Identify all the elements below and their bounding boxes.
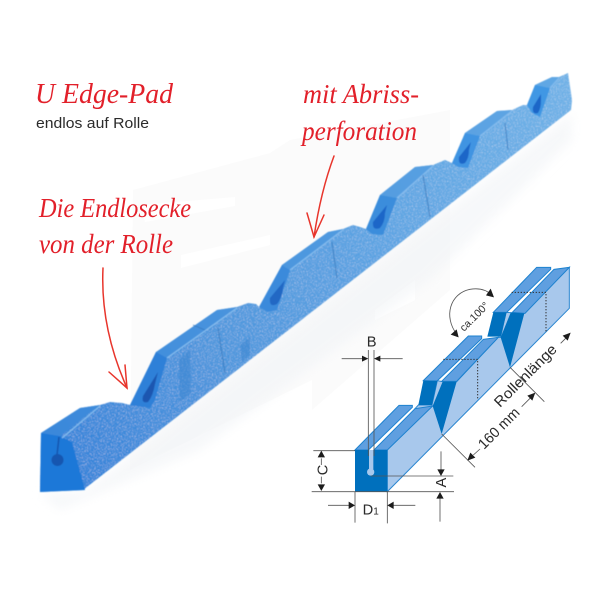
perforation lines — [193, 123, 508, 373]
top faces — [41, 77, 559, 436]
label A: A — [434, 478, 450, 488]
end face hole and slit — [52, 437, 64, 466]
label D1: D1 — [363, 503, 379, 519]
diagram: top faces — [355, 267, 569, 450]
faint background watermark — [130, 110, 450, 470]
notch 4 with teardrop — [452, 133, 480, 168]
dimension lines — [312, 289, 567, 523]
crest highlight lines — [62, 78, 559, 438]
label C: C — [316, 464, 332, 475]
label Rollenlaenge: Rollenlänge — [492, 342, 561, 411]
callout: tear-off perforation: perforation — [300, 116, 417, 146]
callout: tear-off perforation: mit Abriss- — [303, 79, 419, 109]
callout: endless corner: Die Endlosecke — [38, 193, 191, 223]
arrow: to perforation — [307, 156, 334, 237]
diagram: notches — [418, 312, 524, 434]
diagram body: side face — [387, 267, 569, 492]
callout: endless corner — [38, 193, 191, 259]
callout: endless corner: von der Rolle — [39, 229, 173, 259]
arrow: to endless corner — [103, 268, 127, 388]
foam body — [40, 73, 572, 492]
product title: U Edge-Pad — [35, 79, 174, 110]
product subtitle: endlos auf Rolle — [36, 116, 149, 132]
callout: tear-off perforation — [300, 79, 419, 146]
label B: B — [367, 335, 377, 351]
notch 1 with teardrop — [130, 352, 167, 408]
notch 3 with teardrop — [366, 195, 397, 235]
diagram: dotted hidden lines — [443, 292, 546, 398]
notch 5 with teardrop — [527, 85, 550, 117]
notch 2 with teardrop — [259, 265, 290, 312]
front end face — [40, 433, 85, 492]
product reflection — [40, 113, 572, 510]
product photo: blue foam edge pad — [40, 73, 572, 492]
dimension arrowheads — [318, 289, 571, 509]
label 160 mm: 160 mm — [476, 405, 523, 453]
darker foam patches — [179, 337, 250, 402]
diagram: front face — [355, 450, 387, 492]
technical diagram — [312, 267, 571, 523]
label ca. 100 degrees: ca.100° — [458, 300, 492, 334]
